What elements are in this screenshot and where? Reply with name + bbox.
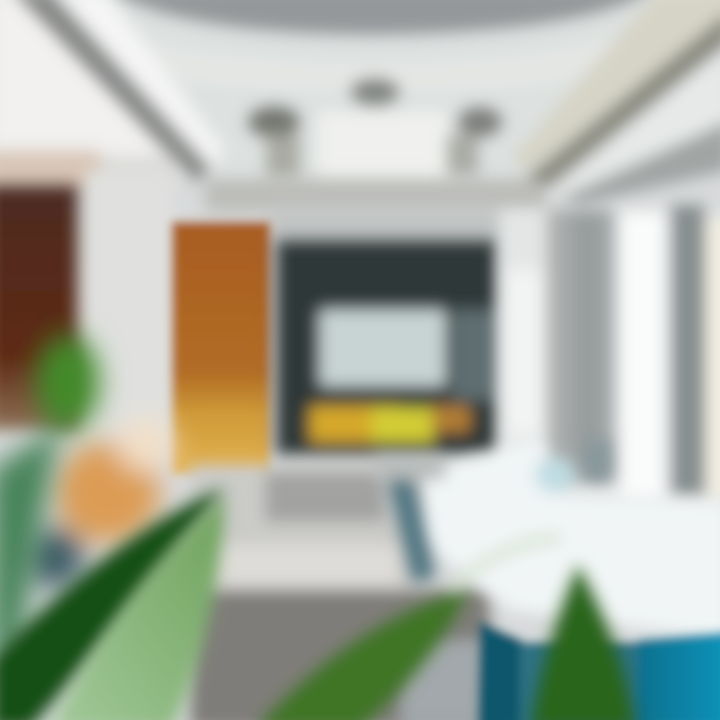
wall screen [320, 310, 445, 386]
floor [190, 465, 490, 720]
back wall header [270, 208, 505, 244]
ceiling [40, 0, 720, 212]
ceiling lights [248, 79, 502, 177]
plant: pale stem arc [450, 538, 560, 590]
left wall [0, 0, 190, 190]
foreground plants [0, 334, 636, 720]
orange cushion [25, 419, 173, 588]
left white column [85, 172, 173, 442]
dark back wall [276, 240, 498, 455]
white sofa [420, 438, 720, 640]
coffee table leg [375, 455, 445, 582]
teal cushions [478, 622, 720, 720]
plant: bottom right leaf [530, 565, 636, 720]
orange wood panel [172, 222, 270, 474]
plant: pale lower left leaf [50, 498, 225, 720]
ceiling beams [12, 0, 720, 205]
yellow console [310, 406, 400, 442]
plant: dark lower left leaf [0, 488, 225, 720]
plant: bottom centre leaf [255, 588, 470, 720]
plant: upper left leaves [0, 334, 100, 660]
dark wood panel [0, 185, 78, 430]
right wall columns [500, 205, 720, 502]
